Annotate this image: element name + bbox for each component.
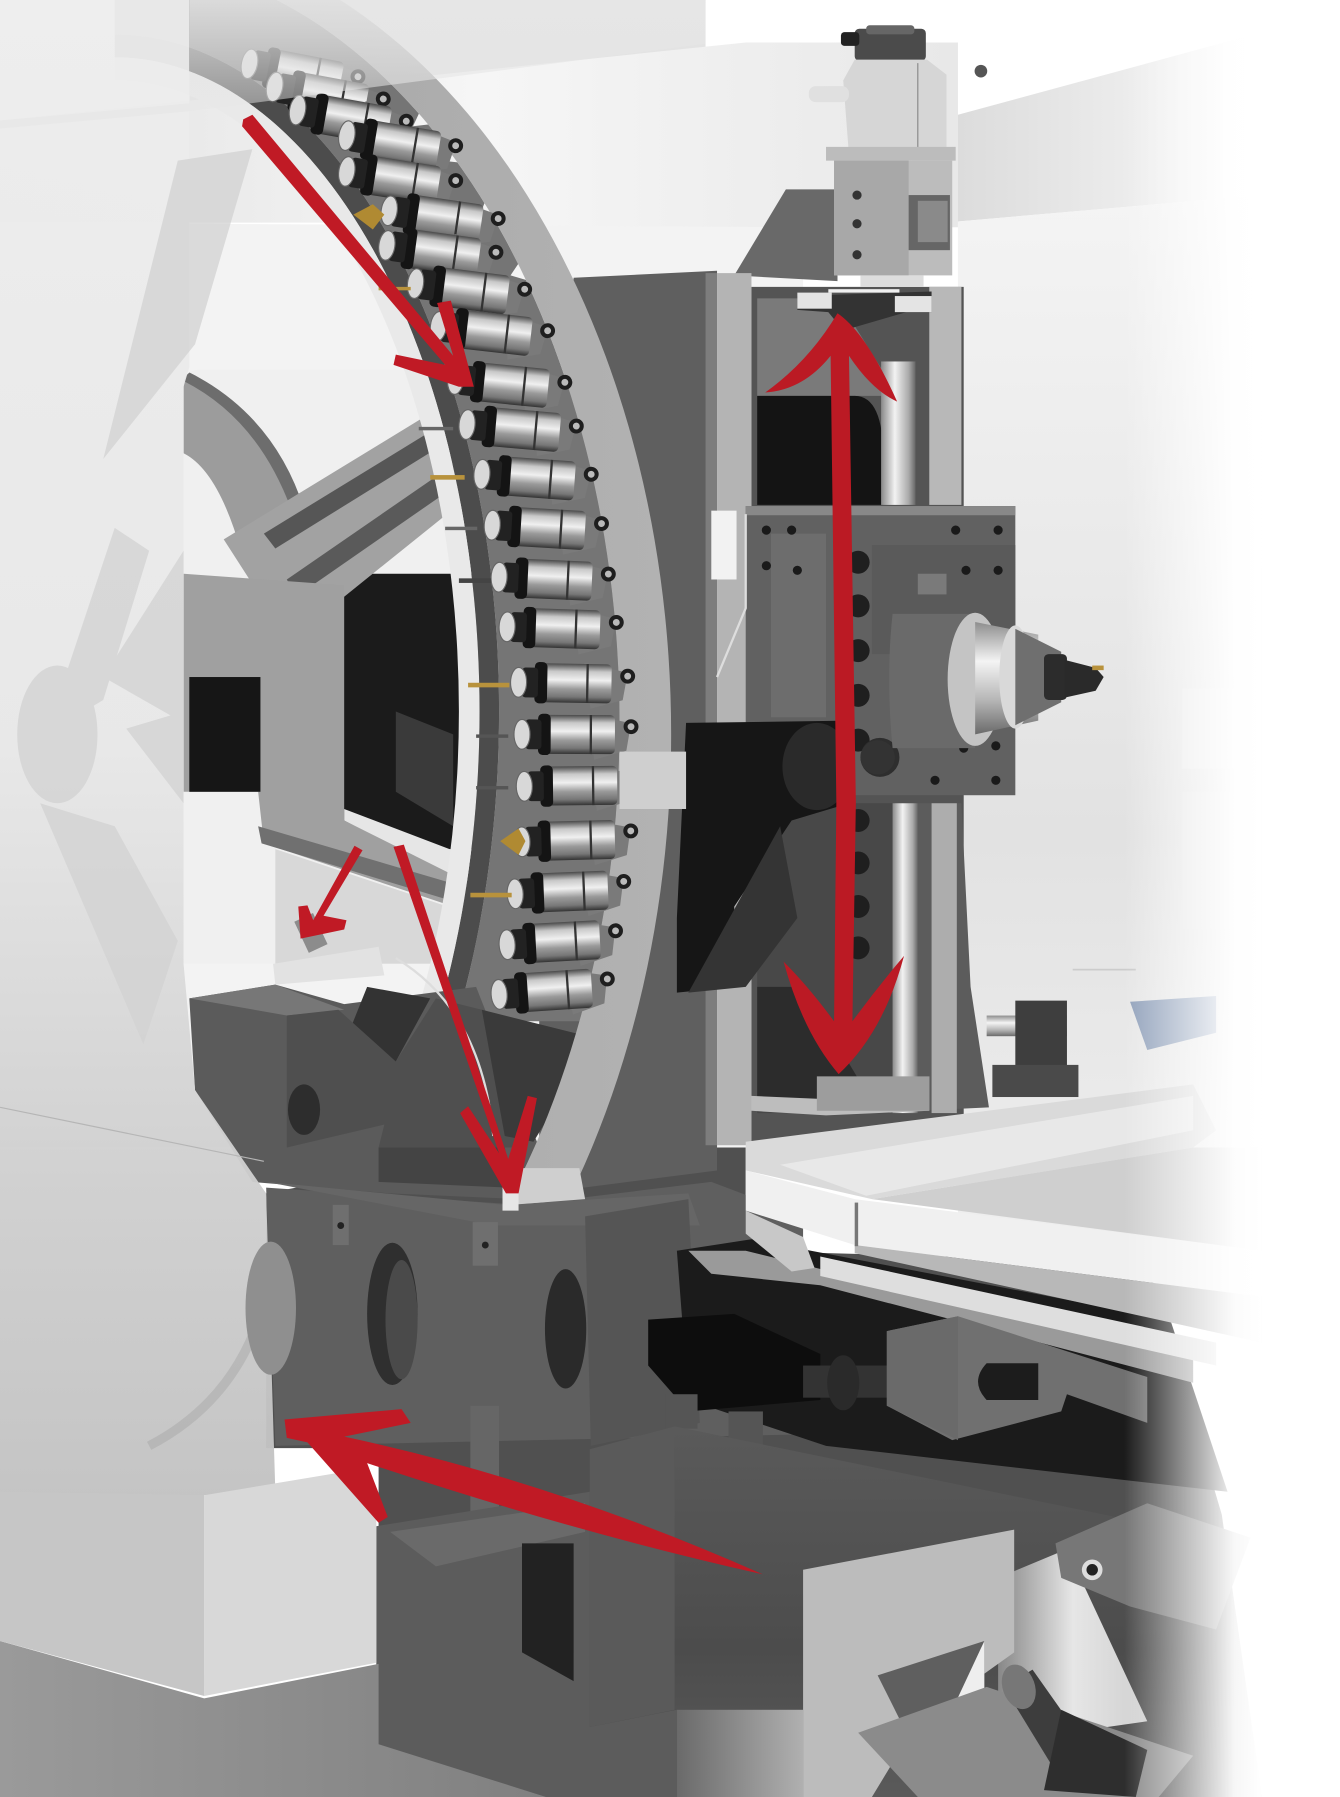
casting: machine base block behind the ring [189, 913, 597, 1199]
ring outer rim [298, 10, 672, 1204]
tool tips: drills and gold cutters [353, 204, 525, 897]
lower dark backdrop of the machine [266, 1148, 1262, 1797]
white gaps near the top of the ring [413, 109, 434, 126]
sheet metal cover and lower drive [803, 1503, 1251, 1797]
casting: column rear body [539, 271, 717, 1193]
lower left corner of enclosure [0, 103, 189, 129]
background enclosure walls [0, 0, 1262, 1262]
rear ball screw and bracket [987, 970, 1216, 1097]
right edge white fade [1124, 0, 1340, 1797]
dark inner band [189, 47, 499, 990]
bolts [762, 526, 1003, 785]
lower left enclosure box and floor [0, 1472, 546, 1797]
faded wheel spokes [17, 149, 252, 1044]
left translucent enclosure panel [0, 0, 276, 1641]
arrow: short diagonal to linear guide [298, 846, 363, 939]
tool holders in the magazine [237, 42, 641, 1020]
chip conveyor pan [746, 1084, 1262, 1366]
arrow: base horizontal travel [285, 1409, 763, 1574]
gearbox link between column and magazine [620, 721, 895, 993]
panel: tool magazine ring [189, 0, 620, 1022]
translucent top panel over the magazine [189, 0, 706, 111]
panel: column and silver guides [706, 189, 989, 1148]
lightening holes along the saddle [847, 551, 870, 959]
spindle housing [889, 614, 975, 748]
arrow: vertical axis up and down [765, 313, 904, 1074]
white bevel [189, 71, 480, 994]
ring plate [189, 0, 620, 1022]
arrow: long diagonal to lower guide [394, 845, 537, 1193]
black drive compartment [648, 1239, 1228, 1492]
trough casting [376, 1426, 1262, 1797]
spindle saddle [711, 506, 1104, 959]
motor and upper housing [797, 25, 956, 330]
panel: wheel spokes seen through the window [184, 369, 482, 966]
arrow: magazine rotation [242, 115, 474, 387]
panel: machine bed with oval openings [246, 1168, 803, 1520]
